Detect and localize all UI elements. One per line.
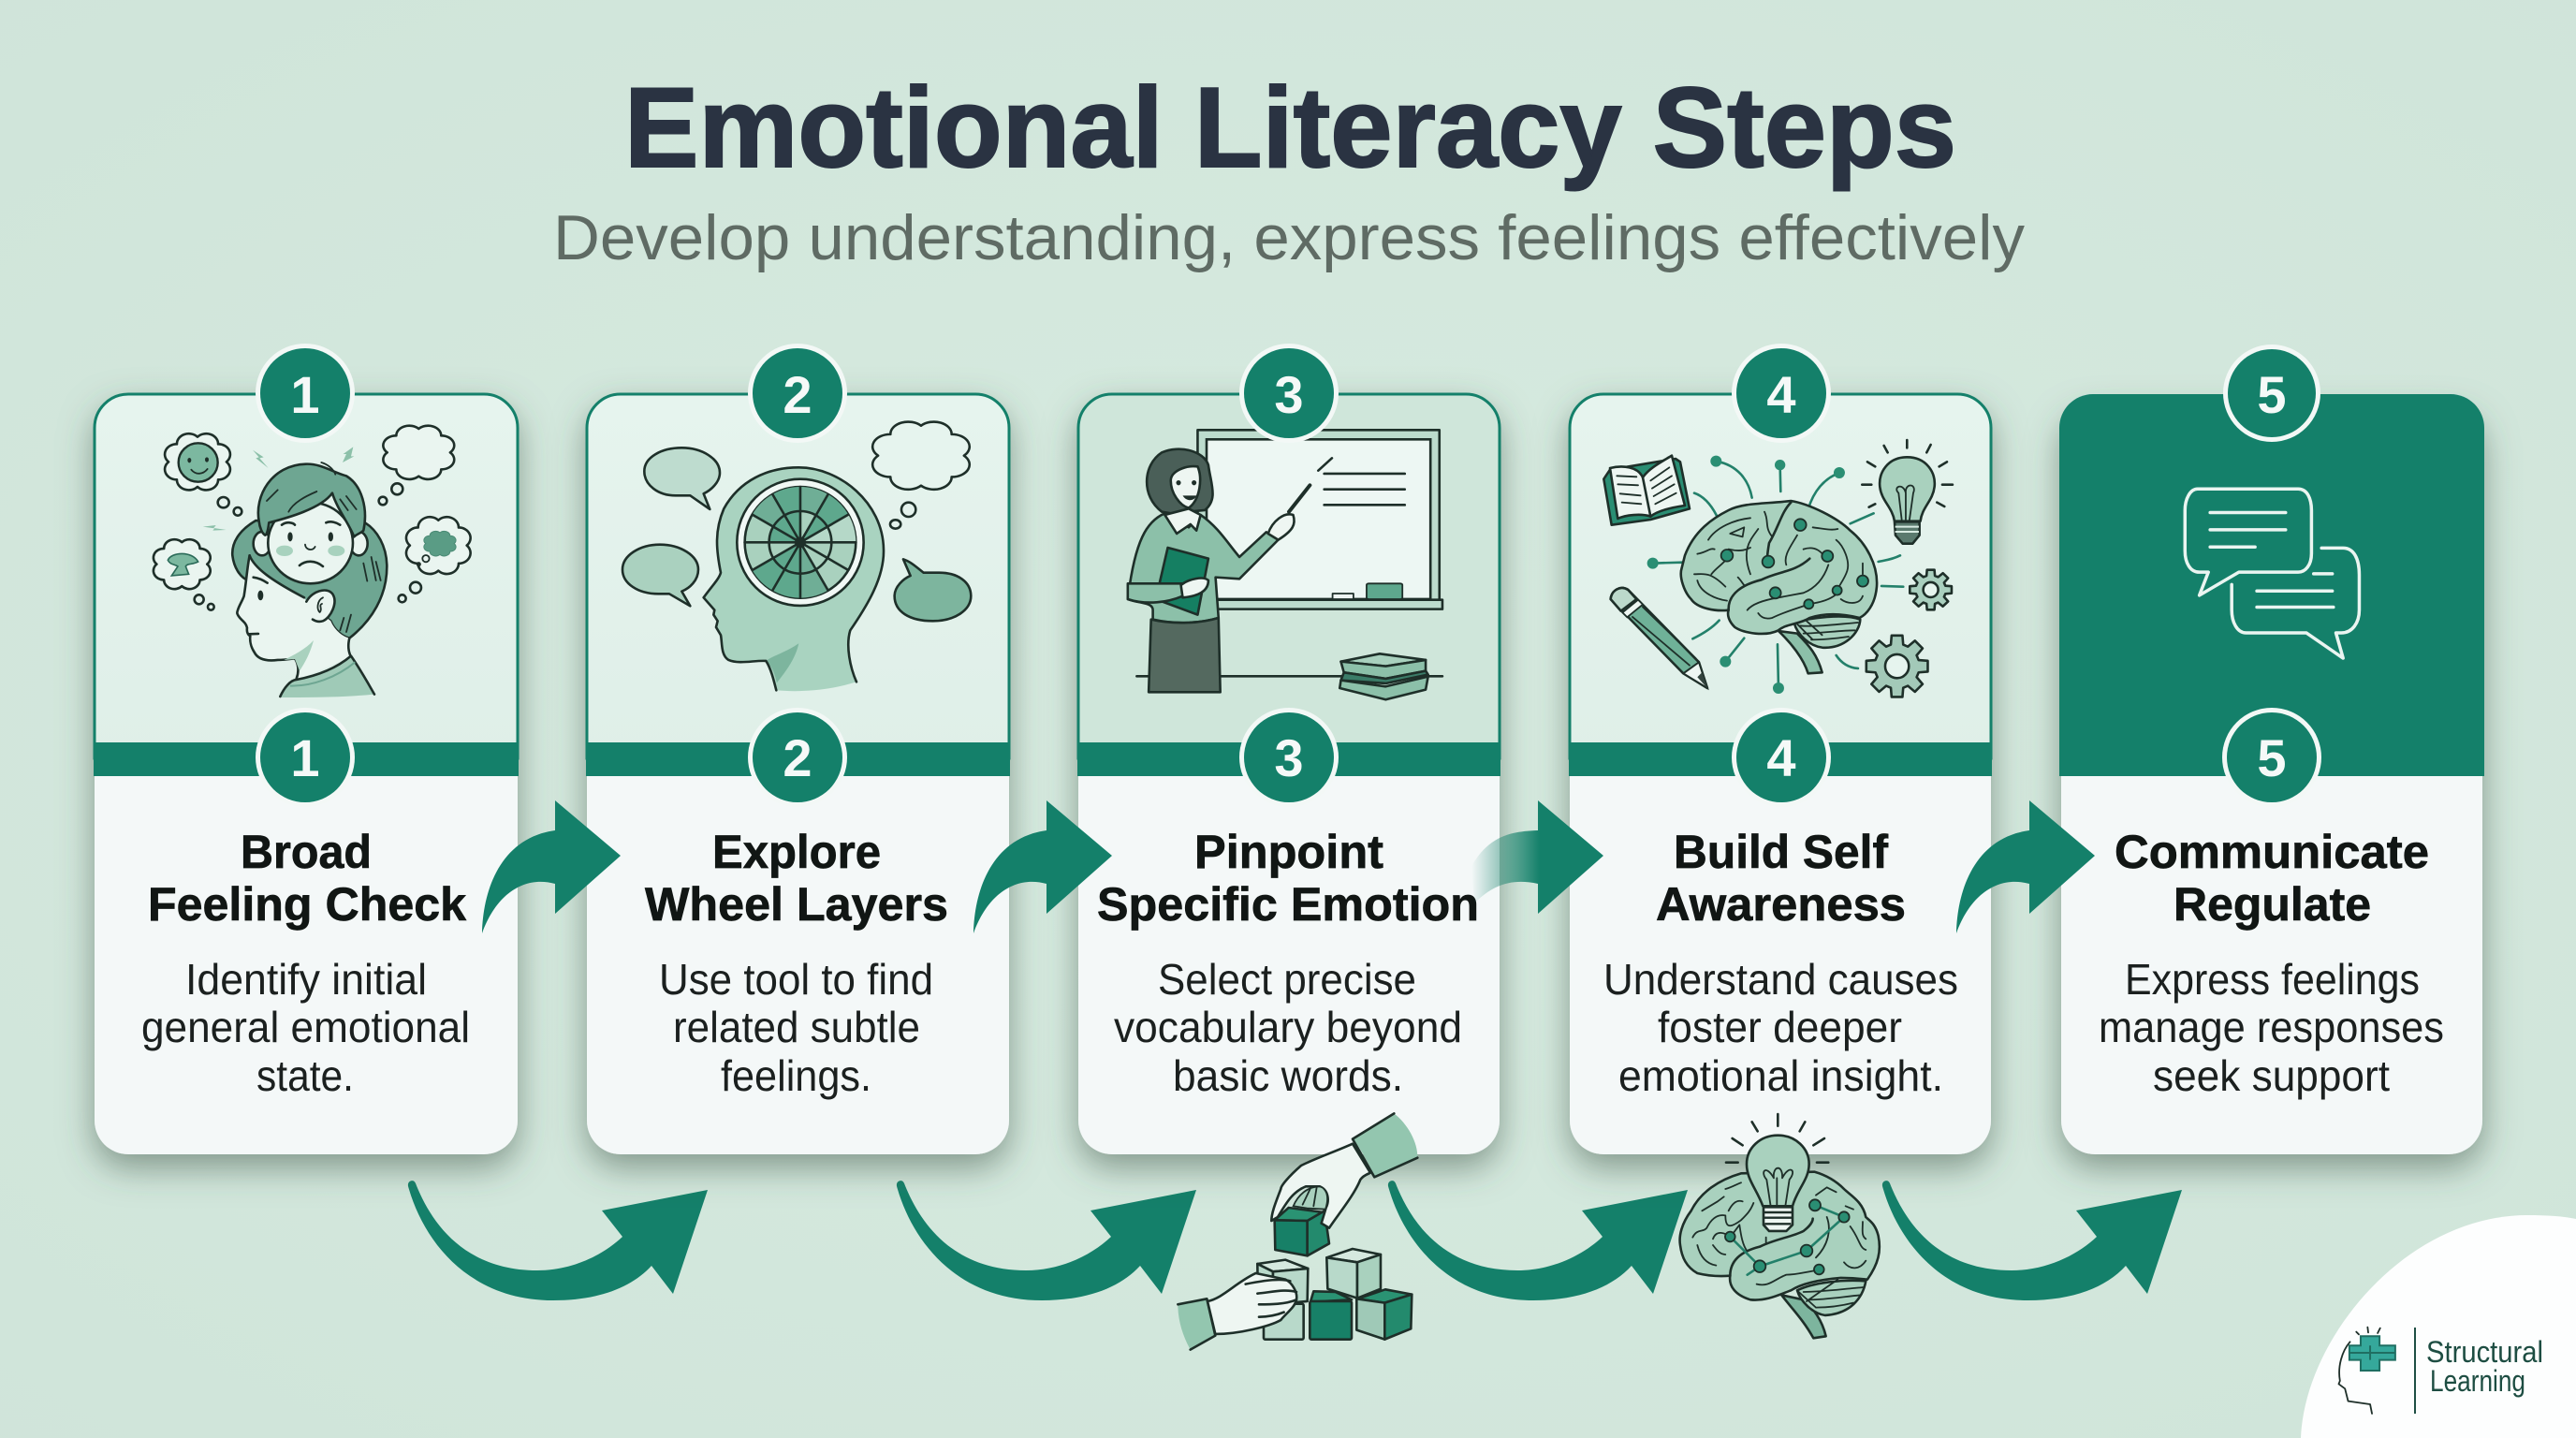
heading (645, 826, 948, 931)
number badge middle (1239, 708, 1339, 807)
panel: step 2 (586, 344, 1010, 1154)
description: Use tool to find (659, 955, 933, 1004)
illustration: teacher at whiteboard (1128, 430, 1442, 699)
number badge middle: 4 (1766, 728, 1796, 787)
description: emotional insight. (1618, 1051, 1943, 1100)
title: Emotional Literacy Steps (624, 64, 1956, 191)
illustration: brain, book, pencil, bulb and gears (1603, 440, 1953, 697)
description (2099, 955, 2444, 1100)
hair back (232, 521, 387, 638)
number badge middle (256, 708, 355, 807)
description: related subtle (673, 1003, 920, 1051)
number badge middle: 3 (1274, 728, 1304, 787)
bottom arrow 1 (408, 1181, 708, 1300)
heading: Wheel Layers (645, 878, 948, 931)
illustration panel (2059, 394, 2484, 776)
number badge top: 1 (290, 365, 320, 424)
icon: speech bubbles (2185, 489, 2359, 658)
bottom arrow 2 (897, 1181, 1196, 1300)
logo text: Structural (2426, 1335, 2543, 1369)
illustration: head with emotion wheel (622, 422, 971, 691)
number badge top: 4 (1766, 365, 1796, 424)
logo text: Learning (2430, 1364, 2525, 1398)
number badge middle: 1 (290, 728, 320, 787)
card body (1078, 394, 1500, 1154)
number badge middle (2222, 708, 2321, 807)
illustration: child with thought clouds (154, 426, 471, 697)
number badge middle: 5 (2257, 728, 2287, 787)
illustration panel (1078, 394, 1500, 758)
description (659, 955, 933, 1100)
white corner shape (2301, 1215, 2576, 1438)
heading: Awareness (1656, 878, 1906, 931)
heading: Pinpoint (1194, 826, 1383, 878)
panel: step 1 (94, 344, 519, 1154)
heading (2115, 826, 2429, 931)
heading: Feeling Check (148, 878, 466, 931)
colour band (1077, 742, 1500, 776)
side arrow 1 (482, 800, 621, 933)
illustration panel (587, 394, 1009, 758)
side arrow 2 (973, 800, 1112, 933)
heading (148, 826, 466, 931)
description: foster deeper (1658, 1003, 1902, 1051)
colour band (1569, 742, 1992, 776)
card body (587, 394, 1009, 1154)
logo divider (2414, 1328, 2416, 1414)
description (141, 955, 470, 1100)
girl's face (254, 532, 271, 555)
description (1114, 955, 1462, 1100)
description: Express feelings (2125, 955, 2420, 1004)
description: seek support (2153, 1051, 2390, 1100)
description (1603, 955, 1958, 1100)
description: manage responses (2099, 1003, 2444, 1051)
logo badge (2301, 1215, 2576, 1438)
number badge middle (1732, 708, 1831, 807)
side arrow 4 (1956, 800, 2095, 933)
logo text (2426, 1335, 2543, 1398)
panel: step 5 (2059, 345, 2484, 1154)
bottom arrow 3 (1388, 1181, 1688, 1300)
heading: Build Self (1674, 826, 1888, 878)
panel: step 3 (1077, 344, 1500, 1154)
number badge top (1732, 344, 1831, 443)
card body (1570, 394, 1991, 1154)
icon: head with cross (2338, 1328, 2395, 1414)
card body (2061, 403, 2482, 1154)
bottom arrow 4 (1882, 1181, 2182, 1300)
description: feelings. (721, 1051, 871, 1100)
number badge top: 3 (1274, 365, 1304, 424)
card body (95, 394, 518, 1154)
heading: Regulate (2174, 878, 2371, 931)
description: Select precise (1158, 955, 1416, 1004)
boy (237, 555, 351, 681)
colour band (94, 742, 519, 776)
heading: Specific Emotion (1097, 878, 1479, 931)
colour band (586, 742, 1010, 776)
illustration panel (95, 394, 518, 758)
number badge top (1239, 344, 1339, 443)
number badge middle (748, 708, 847, 807)
heading (1656, 826, 1906, 931)
description: Identify initial (185, 955, 427, 1004)
number badge top: 5 (2257, 365, 2287, 424)
panel: step 4 (1569, 344, 1992, 1154)
description: vocabulary beyond (1114, 1003, 1462, 1051)
description: Understand causes (1603, 955, 1958, 1004)
description: general emotional (141, 1003, 470, 1051)
heading: Communicate (2115, 826, 2429, 878)
number badge top (256, 344, 355, 443)
heading (1097, 826, 1479, 931)
subtitle: Develop understanding, express feelings effectively (553, 202, 2025, 273)
illustration panel (1570, 394, 1991, 758)
illustration: hands building blocks (1178, 1113, 1417, 1350)
description: state. (256, 1051, 354, 1100)
number badge top: 2 (783, 365, 812, 424)
number badge middle: 2 (783, 728, 812, 787)
heading: Explore (712, 826, 881, 878)
description: basic words. (1173, 1051, 1403, 1100)
number badge top (2223, 345, 2320, 442)
number badge top (748, 344, 847, 443)
illustration: brain with light bulb (1680, 1114, 1880, 1338)
heading: Broad (241, 826, 372, 878)
side arrow 3 (1471, 800, 1603, 914)
